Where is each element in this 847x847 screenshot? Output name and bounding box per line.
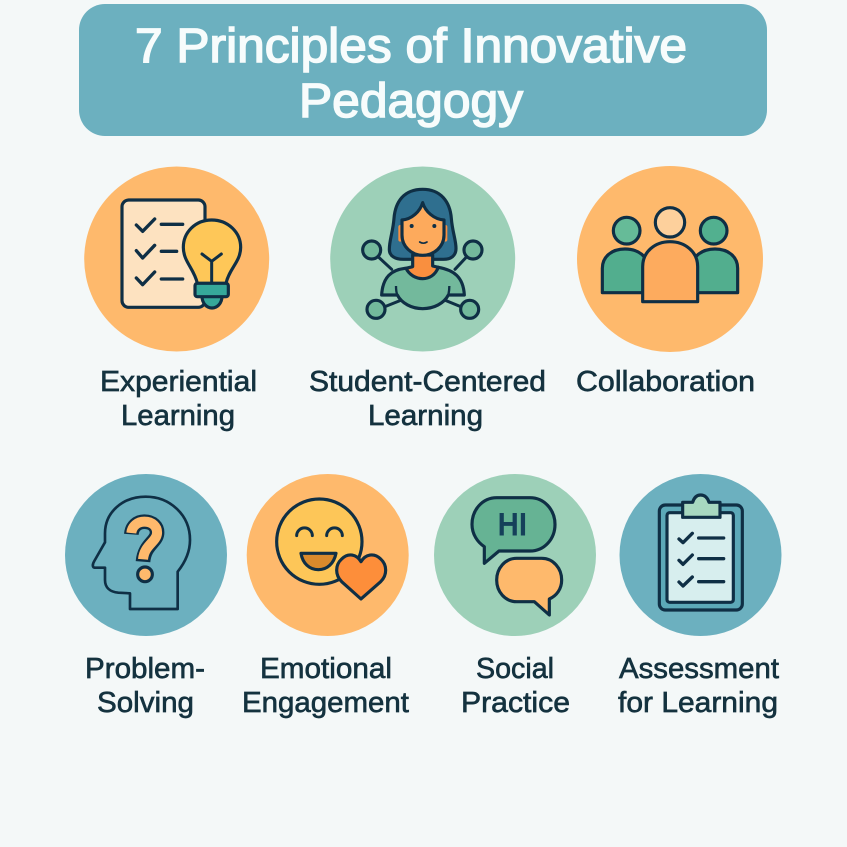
icon: student with connected nodes — [363, 189, 482, 318]
icon: speech bubbles — [472, 498, 562, 615]
label: Student-Centered — [309, 366, 546, 398]
panel: experiential learning — [84, 166, 269, 432]
label: Engagement — [242, 687, 409, 719]
panel: social practice — [434, 474, 596, 719]
label — [461, 653, 570, 719]
title: Pedagogy — [299, 75, 523, 128]
panel: emotional engagement — [242, 474, 409, 719]
label: Solving — [97, 687, 194, 719]
icon: checklist and light bulb — [122, 200, 241, 308]
label: Practice — [461, 687, 570, 719]
title: 7 Principles of Innovative — [135, 20, 687, 73]
panel: assessment for learning — [618, 474, 782, 719]
panel: student-centered learning — [309, 166, 546, 432]
icon: three people — [602, 208, 738, 302]
label — [242, 653, 409, 719]
panel: collaboration — [576, 166, 763, 398]
label — [618, 653, 779, 719]
title — [79, 4, 767, 136]
label: Problem- — [85, 653, 205, 685]
icon: smiling face with heart — [277, 499, 386, 599]
label: Learning — [121, 400, 235, 432]
panel: problem-solving — [65, 474, 227, 719]
label: for Learning — [618, 687, 778, 719]
icon: head with question mark — [93, 497, 190, 609]
icon: speech bubbles: HI — [498, 507, 527, 543]
label: Collaboration — [576, 366, 755, 398]
label: Emotional — [260, 653, 392, 685]
label: Experiential — [100, 366, 257, 398]
label — [85, 653, 205, 719]
icon: clipboard with checklist — [659, 495, 742, 610]
label: Social — [476, 653, 554, 685]
label: Assessment — [619, 653, 779, 685]
label: Learning — [368, 400, 483, 432]
label — [100, 366, 257, 432]
label — [309, 366, 546, 432]
